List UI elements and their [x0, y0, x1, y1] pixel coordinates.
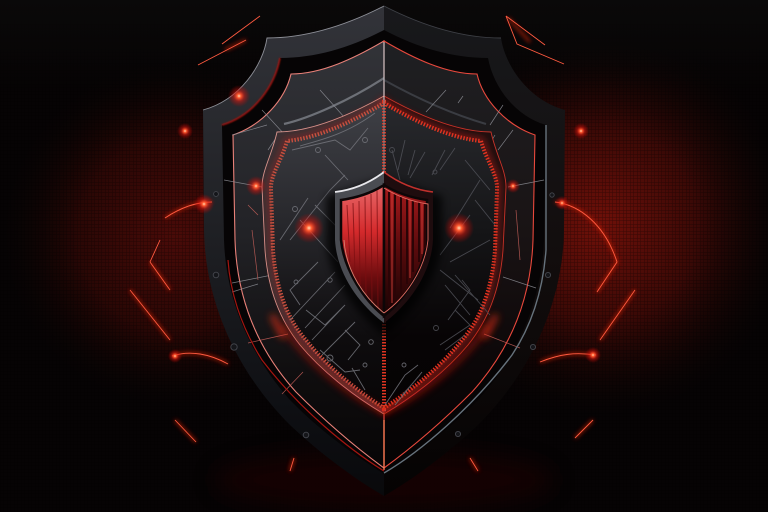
- circuit traces right: [390, 140, 495, 395]
- glowing light points: [168, 85, 601, 363]
- small center shield: [326, 172, 442, 336]
- left arcs and sparks halo: [130, 18, 635, 471]
- edge trim lower: [228, 125, 546, 473]
- circuit traces: [280, 113, 422, 405]
- shield stripes: [344, 188, 428, 313]
- node light left: [294, 213, 324, 243]
- outer ring: [203, 6, 565, 496]
- serrated inner band: [262, 96, 506, 414]
- shield: [203, 6, 565, 496]
- rivets: [213, 192, 554, 438]
- lower glow on band: [272, 315, 496, 412]
- recess: [222, 30, 546, 474]
- plate scratch lines: [224, 90, 544, 394]
- node light right: [444, 213, 474, 243]
- middle plate: [233, 41, 535, 468]
- glow lines outside shield: [130, 16, 635, 471]
- sparks core lines: [130, 16, 635, 471]
- center tip line: [382, 42, 386, 472]
